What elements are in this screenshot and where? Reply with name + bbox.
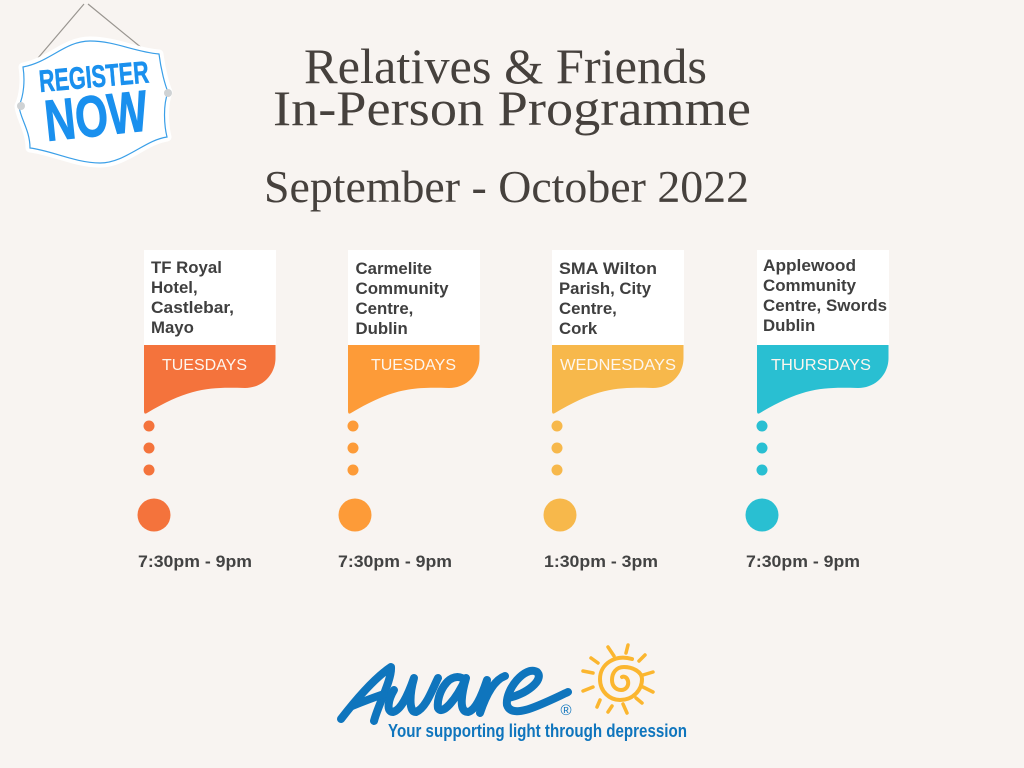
- column: Swords: [746, 250, 889, 571]
- venue name: Centre, Swords: [763, 296, 887, 315]
- venue name: Parish, City: [559, 279, 652, 298]
- venue card: [757, 250, 889, 345]
- logo tagline: Your supporting light through depression: [388, 721, 687, 741]
- venue card: [144, 250, 276, 345]
- venue card: [552, 250, 684, 345]
- timeline dots: [544, 420, 576, 532]
- timeline dots: [746, 420, 778, 532]
- timeline dots: [338, 420, 372, 532]
- time: 1:30pm - 3pm: [544, 553, 658, 571]
- hanging string: [38, 4, 143, 58]
- column: Cork: [544, 250, 684, 571]
- day label: TUESDAYS: [162, 357, 247, 374]
- registered mark: ®: [560, 702, 572, 719]
- day label: WEDNESDAYS: [560, 357, 676, 374]
- aware logo: [341, 645, 687, 741]
- logo sun: [583, 645, 653, 713]
- title: In-Person Programme: [273, 80, 751, 136]
- venue name: Community: [356, 279, 449, 298]
- venue name: Dublin: [356, 319, 408, 338]
- title: Relatives & Friends: [304, 38, 707, 94]
- subtitle: dates: September - October 2022: [264, 162, 749, 212]
- title: [273, 38, 751, 136]
- venue name: Mayo: [151, 318, 194, 337]
- time: 7:30pm - 9pm: [338, 553, 452, 571]
- sign text: REGISTER: [38, 55, 150, 99]
- venue name: Centre,: [559, 299, 617, 318]
- register now sign: NOW: [42, 78, 151, 154]
- day banner: [144, 345, 276, 414]
- day banner: [757, 345, 888, 414]
- time: 7:30pm - 9pm: [746, 553, 860, 571]
- column: Dublin: [338, 250, 480, 571]
- venue card: [348, 250, 480, 345]
- timeline dots: [138, 420, 170, 532]
- venue name: Applewood: [763, 256, 856, 275]
- day banner: [552, 345, 684, 414]
- day label: TUESDAYS: [371, 357, 456, 374]
- sign pins: [17, 102, 25, 110]
- day banner: [348, 345, 480, 414]
- venue name: Hotel,: [151, 278, 198, 297]
- logo script mark: [341, 667, 568, 721]
- venue name: Dublin: [763, 316, 815, 335]
- venue name: Carmelite: [356, 259, 432, 278]
- time: 7:30pm - 9pm: [138, 553, 252, 571]
- venue name: Centre,: [356, 299, 413, 318]
- column: Castlebar: [138, 250, 276, 571]
- venue name: Castlebar,: [151, 298, 234, 317]
- venue name: Community: [763, 276, 857, 295]
- venue name: Cork: [559, 319, 598, 338]
- sign board: [19, 41, 168, 163]
- venue name: TF Royal: [151, 258, 222, 277]
- register now sign: [17, 4, 172, 163]
- venue name: SMA Wilton: [559, 259, 657, 278]
- day label: THURSDAYS: [771, 357, 871, 374]
